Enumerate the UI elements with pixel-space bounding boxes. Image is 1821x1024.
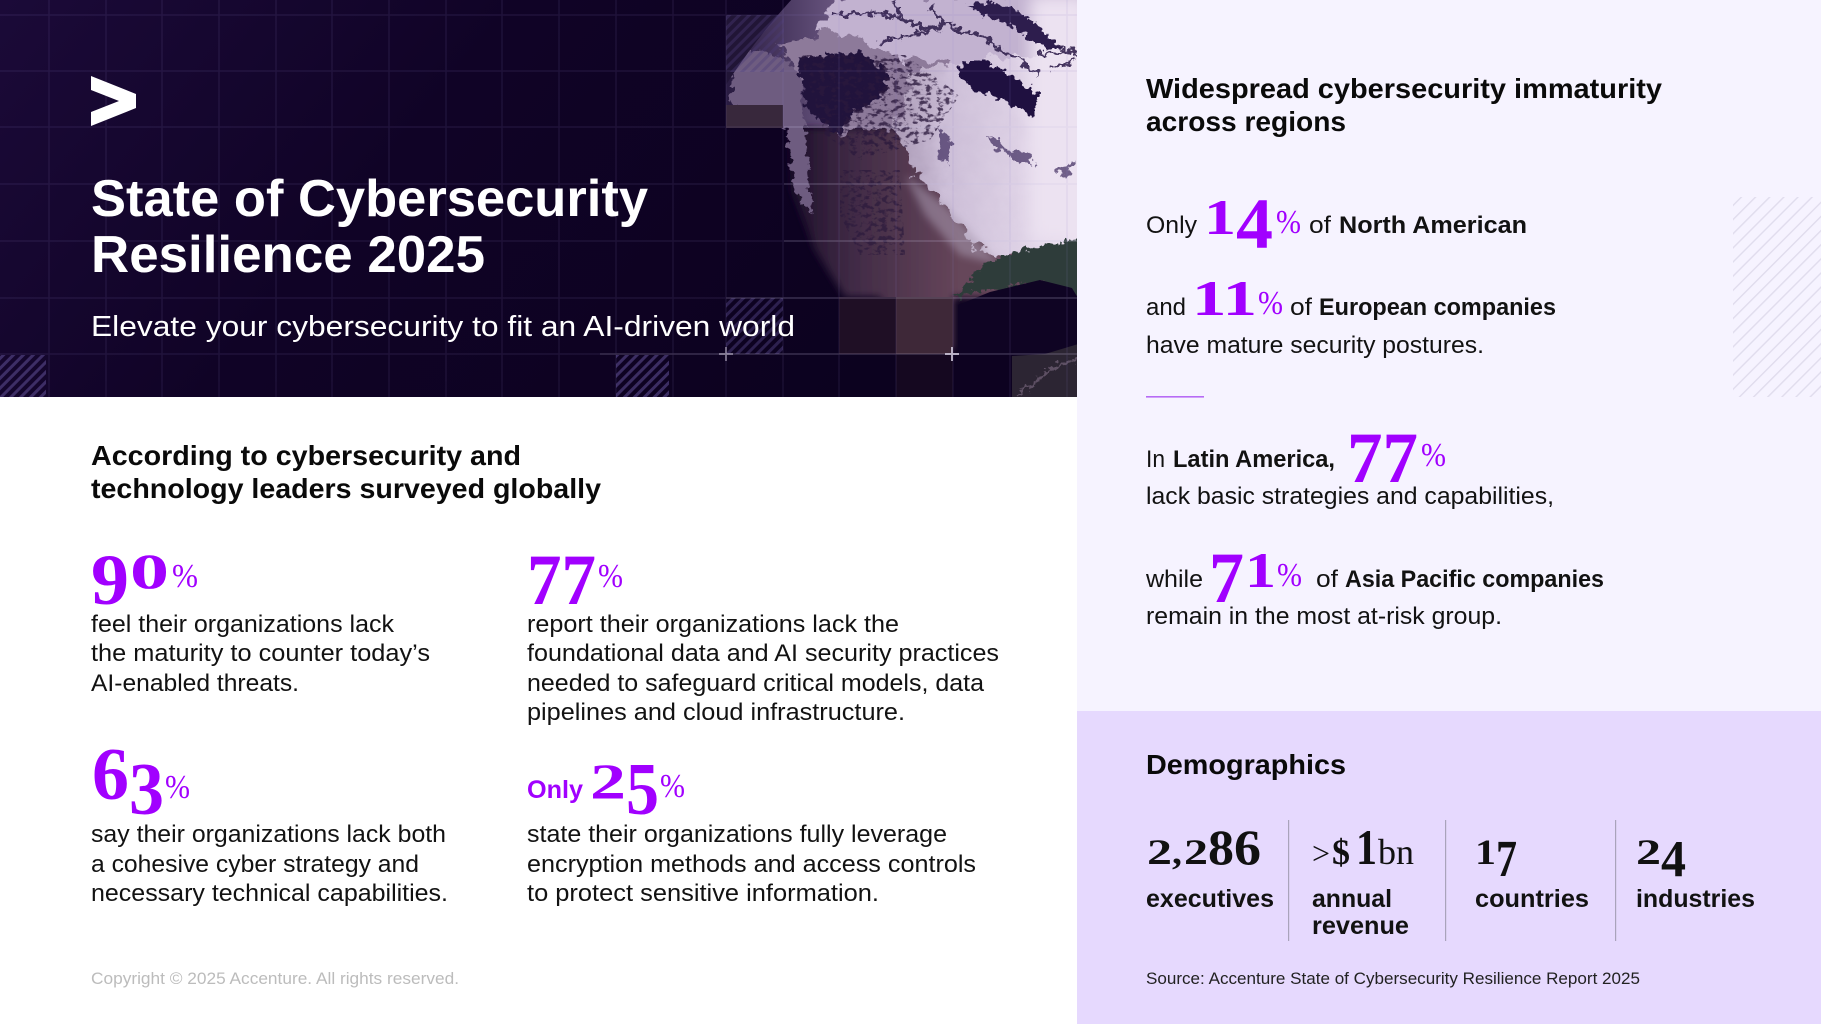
title: State of Cybersecurity: [91, 170, 648, 228]
stat: Asia Pacific 71 percent: while: [1145, 566, 1203, 593]
stat: 63 percent: a cohesive cyber strategy and: [91, 851, 419, 878]
stat: North America 14 percent: of: [1309, 212, 1331, 239]
stat: Latin America 77 percent: In: [1146, 446, 1165, 473]
heading: regions: Widespread cybersecurity immaturity: [1146, 73, 1662, 104]
stat: Latin America 77 percent: Latin America,: [1173, 446, 1335, 473]
stat: industries: 4: [1661, 831, 1686, 888]
stat: 90 percent: 0: [130, 543, 169, 599]
stat: annual revenue: [1312, 819, 1414, 940]
stat: only 25 percent: 5: [626, 749, 659, 831]
stat: Asia Pacific 71 percent: 1: [1245, 542, 1276, 598]
stat: only 25 percent: 2: [590, 753, 626, 809]
stat: executives: 2: [1147, 832, 1172, 872]
stat: 77 percent: %: [598, 558, 623, 595]
stat: 63 percent: [91, 734, 448, 907]
stat: annual revenue: annual: [1312, 885, 1392, 913]
stat: countries: countries: [1475, 885, 1589, 913]
stat: 77 percent: report their organizations lack the: [527, 611, 899, 638]
stat: 63 percent: 6: [92, 734, 129, 816]
stat: annual revenue: $: [1332, 832, 1350, 872]
stat: 63 percent: say their organizations lack both: [91, 821, 446, 848]
source note: Source: Accenture State of Cybersecurity Resilience Report 2025: [1146, 969, 1640, 988]
stat: 63 percent: 3: [129, 749, 164, 831]
stat: 90 percent: 9: [91, 540, 129, 620]
stat: North America 14 percent: 1: [1204, 189, 1236, 245]
subtitle: Elevate your cybersecurity to fit an AI-driven world: [91, 311, 795, 343]
stat: Asia Pacific 71 percent: remain in the most at-risk group.: [1146, 603, 1502, 630]
stat: 77 percent: needed to safeguard critical models, data: [527, 670, 985, 697]
heading: regions: [1146, 73, 1662, 137]
icon: plus marks: [719, 347, 959, 361]
stat: Asia Pacific 71 percent: Asia Pacific companies: [1345, 566, 1604, 593]
heading: survey: technology leaders surveyed globally: [91, 473, 601, 504]
stat: 77 percent: foundational data and AI security practices: [527, 640, 999, 667]
title: [92, 178, 648, 272]
stat: Europe 11 percent: European companies: [1319, 294, 1556, 321]
stat: only 25 percent: encryption methods and access controls: [527, 851, 976, 878]
stat: Asia Pacific 71 percent: of: [1316, 566, 1338, 593]
stat: Asia Pacific 71 percent: [1145, 538, 1604, 630]
stat: North America 14 percent: [1146, 184, 1527, 264]
stat: annual revenue: bn: [1378, 832, 1414, 872]
stat: Europe 11 percent: [1146, 270, 1556, 359]
logo: Accenture chevron: [91, 76, 136, 126]
stat: countries: [1475, 831, 1589, 913]
heading: demographics: Demographics: [1146, 749, 1346, 780]
heading: survey: [91, 440, 601, 504]
stat: Europe 11 percent: 11: [1192, 270, 1257, 326]
image: globe: [726, 0, 1090, 404]
stat: only 25 percent: Only: [527, 776, 583, 804]
panel: hero banner: [0, 0, 1090, 404]
stat: Latin America 77 percent: %: [1421, 437, 1446, 474]
stat: Asia Pacific 71 percent: 7: [1209, 538, 1244, 618]
stat: industries: industries: [1636, 885, 1755, 913]
hatch decoration: [1733, 197, 1821, 397]
stat: countries: 1: [1475, 832, 1496, 872]
stat: 90 percent: [91, 540, 430, 697]
stat: executives: 8: [1208, 819, 1234, 875]
stat: Latin America 77 percent: [1146, 418, 1554, 510]
title: Resilience 2025: [91, 226, 485, 284]
stat: countries: 7: [1496, 831, 1517, 888]
stat: North America 14 percent: %: [1276, 204, 1301, 241]
stat: 77 percent: 77: [527, 540, 596, 620]
stat: Latin America 77 percent: lack basic strategies and capabilities,: [1146, 483, 1554, 510]
stat: 90 percent: AI-enabled threats.: [91, 670, 299, 697]
stat: annual revenue: >: [1312, 835, 1330, 871]
panel: global survey findings: [91, 440, 999, 988]
stat: Europe 11 percent: have mature security postures.: [1146, 332, 1484, 359]
copyright: Copyright © 2025 Accenture. All rights reserved.: [91, 969, 459, 988]
stat: Europe 11 percent: and: [1146, 294, 1186, 321]
stat: industries: 2: [1636, 832, 1661, 872]
stat: executives: 6: [1234, 819, 1261, 875]
stat: Europe 11 percent: %: [1258, 285, 1283, 322]
stat: only 25 percent: state their organizations fully leverage: [527, 821, 947, 848]
stat: Europe 11 percent: of: [1290, 294, 1312, 321]
stat: 90 percent: %: [172, 558, 198, 595]
stat: executives: [1146, 819, 1274, 913]
stat: only 25 percent: %: [660, 768, 685, 805]
heading: regions: across regions: [1146, 106, 1346, 137]
stat: 90 percent: the maturity to counter today’s: [91, 640, 430, 667]
stat: executives: 2: [1184, 832, 1208, 872]
stat: 63 percent: necessary technical capabilities.: [91, 880, 448, 907]
stat: 77 percent: pipelines and cloud infrastructure.: [527, 699, 905, 726]
stat: 90 percent: feel their organizations lack: [91, 611, 395, 638]
panel: regional immaturity: [1077, 0, 1821, 711]
stat: industries: [1636, 831, 1755, 913]
stat: annual revenue: revenue: [1312, 912, 1409, 940]
stat: only 25 percent: to protect sensitive information.: [527, 880, 879, 907]
hatch patches: [0, 298, 783, 397]
stat: North America 14 percent: Only: [1146, 212, 1197, 239]
stat: executives: ,: [1172, 832, 1182, 872]
panel: demographics: [1077, 711, 1821, 1024]
stat: Latin America 77 percent: 77: [1347, 418, 1418, 498]
heading: survey: According to cybersecurity and: [91, 440, 521, 471]
stat: 63 percent: %: [165, 769, 190, 806]
stat: North America 14 percent: 4: [1236, 184, 1273, 264]
stat: annual revenue: 1: [1356, 819, 1377, 875]
stat: 77 percent: [527, 540, 999, 726]
stat: executives: executives: [1146, 885, 1274, 913]
stat: North America 14 percent: North American: [1339, 212, 1527, 239]
stat: only 25 percent: [527, 749, 976, 907]
stat: Asia Pacific 71 percent: %: [1277, 557, 1302, 594]
